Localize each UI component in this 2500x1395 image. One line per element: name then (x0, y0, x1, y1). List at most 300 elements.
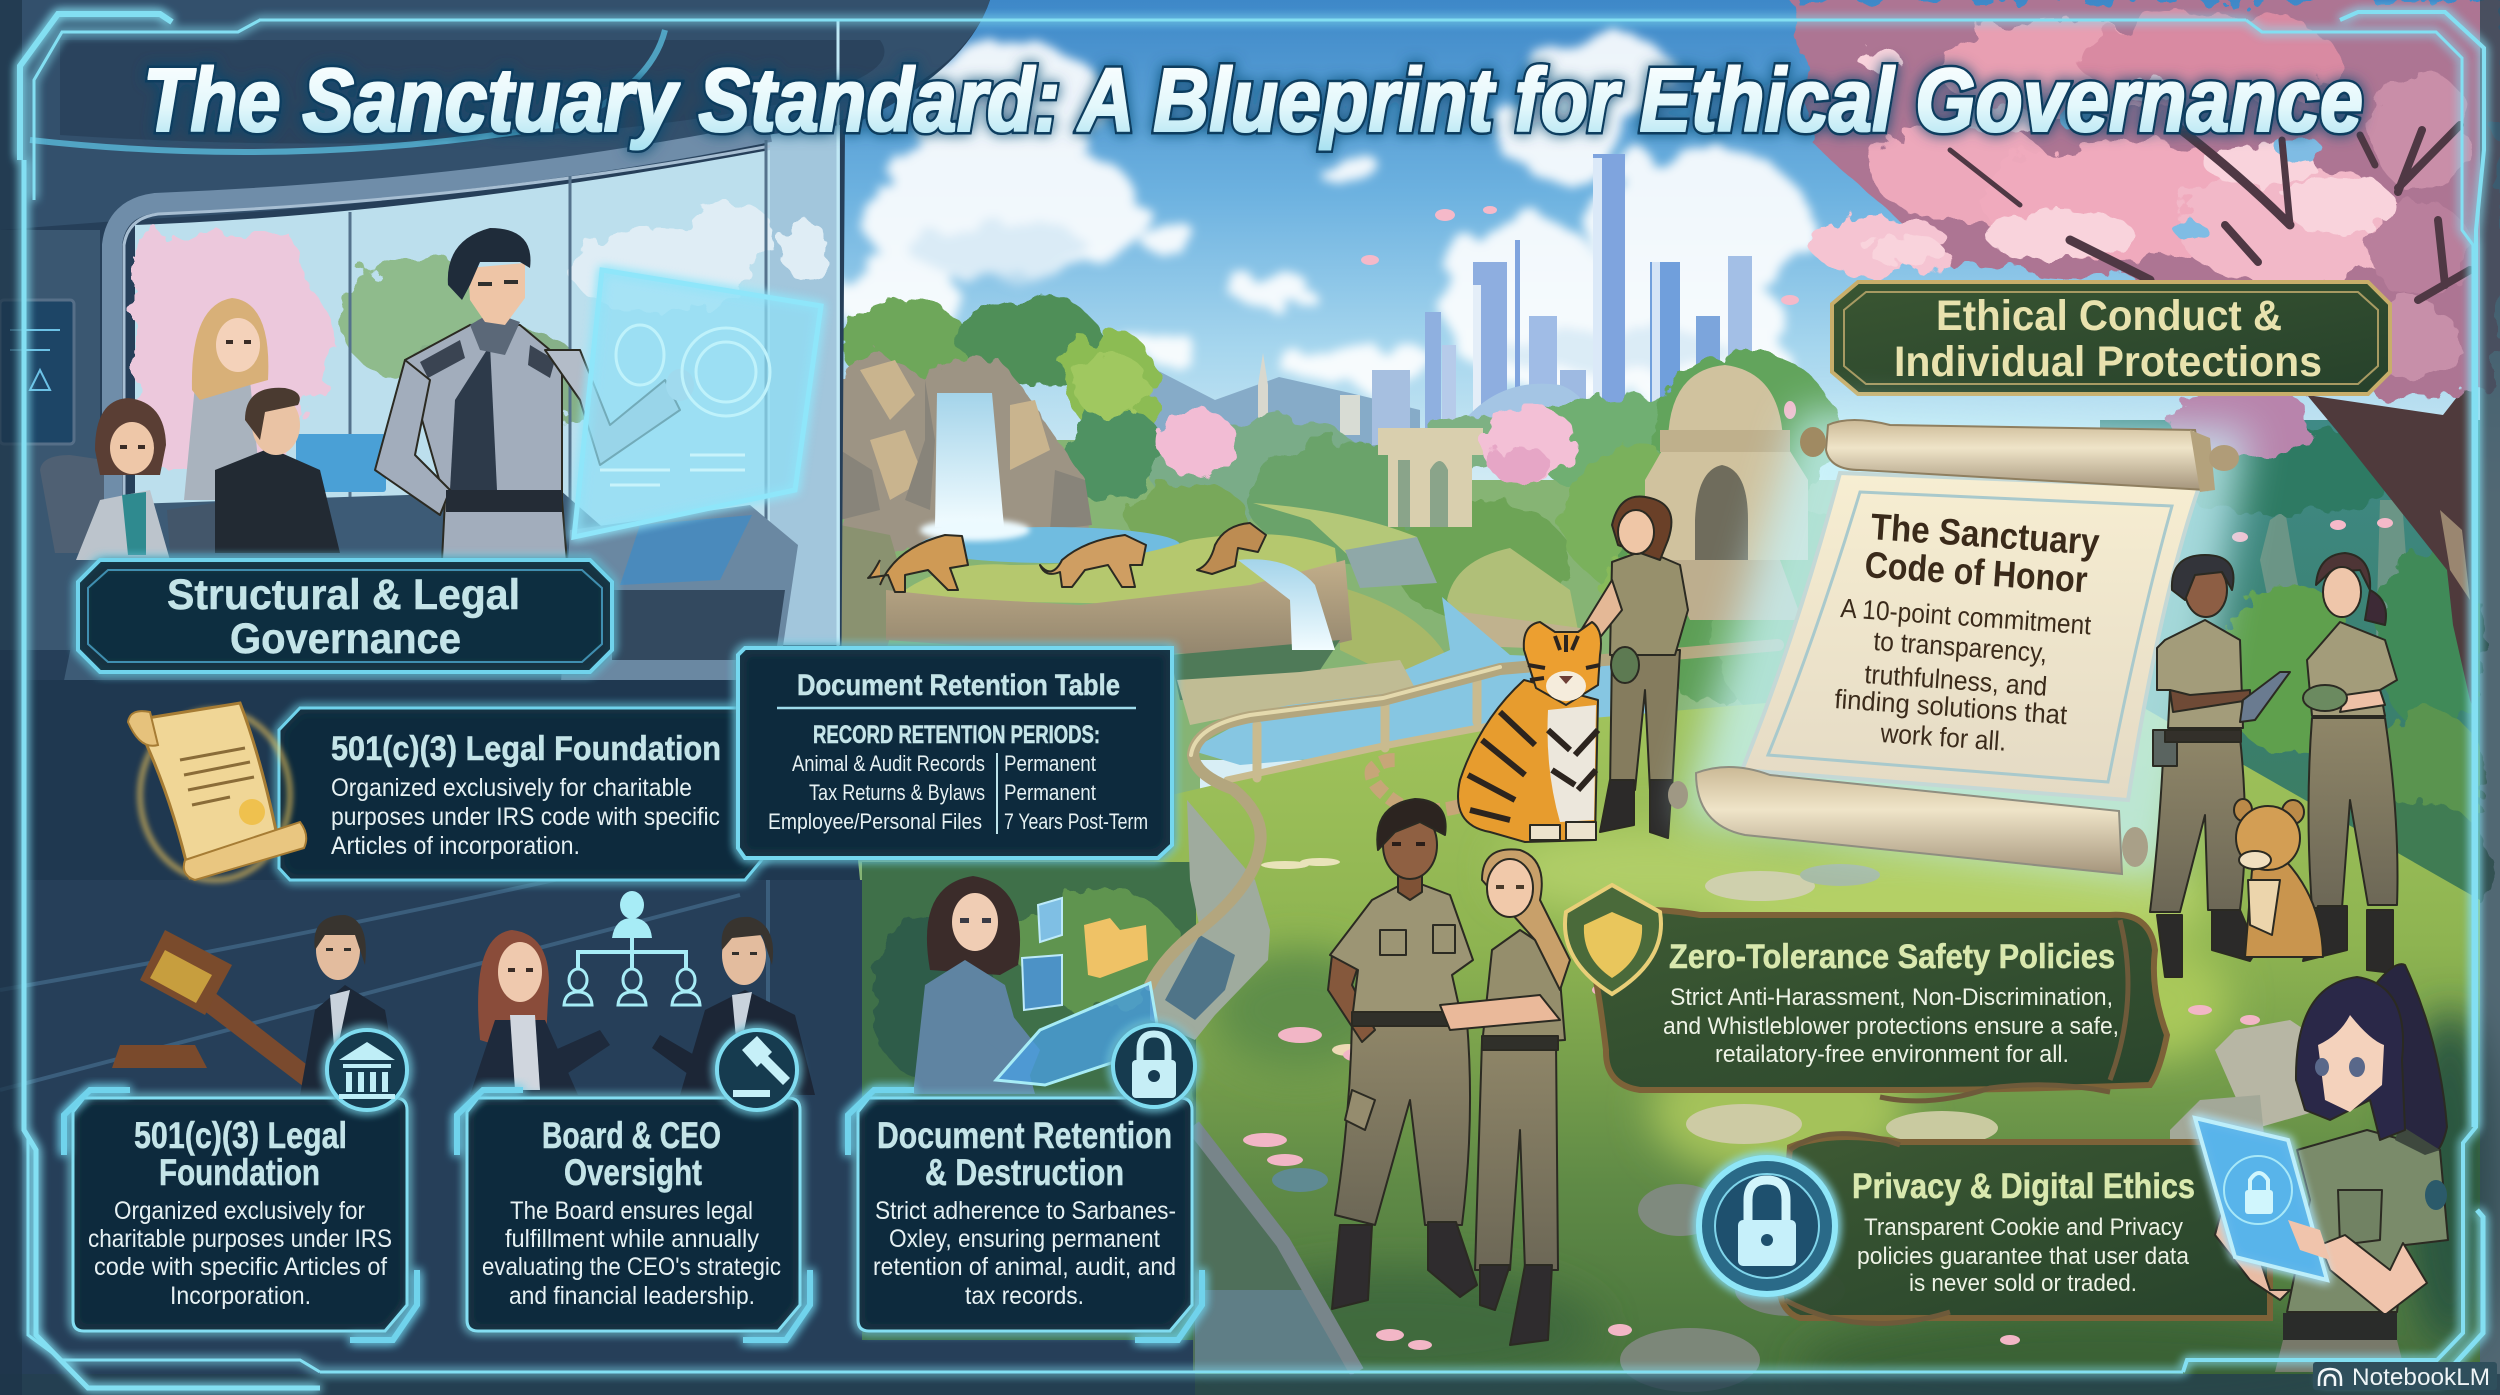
icon: padlock badge (1113, 1025, 1195, 1107)
woman ranger bottom right (2195, 964, 2448, 1372)
paper inner border (1768, 492, 2172, 782)
table rows: 7 Years Post-Term (1004, 809, 1148, 834)
writing lines (180, 748, 254, 805)
coat (405, 325, 570, 600)
shirt (732, 992, 752, 1060)
ranger behind tiger (1575, 497, 1688, 838)
icon: floating folders and documents (1022, 898, 1148, 1010)
body: policies guarantee that user data (1857, 1243, 2190, 1270)
boots (1600, 780, 1672, 838)
corner accent bottom right (743, 1270, 810, 1340)
arm (985, 1000, 1040, 1075)
lower left rock and bush (840, 525, 906, 650)
face (952, 893, 998, 951)
hand (666, 369, 694, 401)
body: Oxley, ensuring permanent (889, 1225, 1160, 1253)
face (2323, 567, 2361, 617)
waterfall (935, 393, 1004, 527)
lower curve terrace (1340, 587, 1447, 680)
grass meadow (1150, 700, 2480, 1395)
table rows (768, 751, 1148, 834)
eyes (1392, 842, 1425, 846)
belt (2165, 730, 2241, 742)
lower grey railing (1193, 1126, 1357, 1372)
top-right corner (2183, 12, 2484, 1372)
card: legal foundation (64, 1090, 417, 1340)
heading line 2: Governance (230, 615, 461, 663)
file 2 (1022, 955, 1062, 1010)
body (2245, 860, 2323, 957)
female ranger (1440, 849, 1570, 1345)
body: Transparent Cookie and Privacy (1864, 1214, 2183, 1241)
eyes (326, 948, 351, 951)
top person (612, 891, 652, 938)
background: mid foliage (840, 295, 1890, 730)
face (2185, 563, 2227, 617)
muzzle (1546, 671, 1586, 701)
hair (95, 398, 166, 475)
badge background (2313, 1362, 2497, 1390)
trousers (2275, 1340, 2405, 1372)
bottom line (320, 1370, 2183, 1374)
chair (40, 455, 104, 553)
body (482, 1197, 781, 1310)
cargo pocket (1345, 1090, 1375, 1130)
icon: gold shield (1565, 885, 1661, 994)
inner shirt (122, 492, 146, 555)
icon: charter parchment (128, 703, 306, 880)
male ranger (1328, 799, 1477, 1309)
colonnade (1378, 428, 1483, 527)
background: park land base (840, 440, 2110, 890)
grass top (905, 534, 1340, 605)
cherry blossoms light clusters (1858, 50, 2395, 370)
legs (1335, 1022, 1470, 1225)
glass (574, 270, 821, 537)
eyes (960, 918, 991, 923)
body (1663, 984, 2119, 1068)
suit (300, 985, 400, 1095)
lower terrace stones (1177, 660, 1416, 725)
arm (1575, 580, 1622, 650)
background: forest behind right rangers (2100, 420, 2490, 940)
illustration: suited man right (652, 917, 815, 1095)
card frame (73, 1098, 407, 1331)
scroll body: to transparency, (1873, 626, 2048, 668)
hair (192, 298, 268, 400)
shirt (2287, 1130, 2448, 1312)
bottom band outside frame (0, 1374, 2500, 1395)
arm and hand (555, 1030, 610, 1075)
panel: section header ethical conduct (1832, 282, 2390, 394)
glove with plate (2303, 685, 2347, 711)
wall monitor (0, 300, 74, 444)
lower hand arm (2215, 1205, 2290, 1300)
icon: org chart (564, 891, 700, 1005)
eyes (120, 445, 145, 449)
boots (1480, 1265, 1552, 1345)
background: futuristic city skyline (1258, 154, 1752, 445)
desk (60, 490, 640, 700)
forest base (2100, 420, 2480, 940)
medallion (1699, 1158, 1835, 1294)
face (498, 942, 542, 1002)
commander figure (375, 228, 694, 600)
inner ring (1715, 1174, 1819, 1278)
gavel (733, 1036, 790, 1097)
card frame (467, 1098, 800, 1331)
suit (680, 990, 815, 1095)
title (542, 1115, 721, 1193)
scroll: sanctuary code of honor (1668, 410, 2250, 880)
dark chest panel (450, 345, 497, 490)
eyes (226, 340, 251, 344)
background: clouds (840, 33, 1810, 405)
face (2318, 1015, 2384, 1112)
lower rail (1227, 724, 1500, 780)
illustration: suited woman (470, 930, 610, 1095)
card: board and ceo oversight (457, 1090, 810, 1340)
face (252, 395, 300, 455)
body (1458, 680, 1598, 842)
body: evaluating the CEO's strategic (482, 1253, 781, 1281)
ceiling light strip (30, 30, 665, 152)
sky gaps in canopy (2060, 108, 2322, 240)
corner accent top left (848, 1090, 914, 1155)
heading: 501(c)(3) Legal Foundation (331, 730, 721, 768)
scroll title (1863, 506, 2101, 601)
hair (2172, 555, 2233, 600)
panel: privacy and digital ethics (1779, 1134, 2270, 1324)
title rule (777, 707, 1136, 709)
terrace ledge (886, 534, 1352, 700)
lock body (1738, 1220, 1796, 1266)
frame (738, 648, 1172, 858)
shirt (1482, 930, 1565, 1045)
keyhole (1148, 1070, 1160, 1082)
main top line (259, 18, 2246, 22)
card: document retention and destruction (848, 1090, 1202, 1340)
icon: glowing padlock medallion (1699, 1158, 1835, 1294)
wall (1150, 800, 1270, 1040)
colonnade gaps (1398, 460, 1448, 527)
badge circle (1113, 1025, 1195, 1107)
corner accent bottom right (1135, 1270, 1202, 1340)
corner accent bottom right (350, 1270, 417, 1340)
hair (1482, 849, 1570, 990)
body: retailatory-free environment for all. (1715, 1041, 2069, 1068)
path paving (1195, 1290, 1357, 1372)
belt (446, 490, 562, 512)
belly (1548, 705, 1596, 822)
legs (2308, 718, 2398, 908)
bottom curl (184, 822, 306, 880)
seated man (167, 388, 340, 553)
collar (470, 312, 520, 355)
panel: section header structural and legal governance (78, 560, 612, 672)
left arm (375, 360, 450, 515)
ponytail (2375, 964, 2447, 1160)
ceiling dark ring (60, 40, 884, 144)
console lower (612, 590, 785, 660)
scroll body: A 10-point commitment (1840, 593, 2093, 641)
background: distant mountains (1090, 362, 1420, 460)
forearm (2340, 690, 2385, 712)
sheet (135, 703, 280, 878)
eyes (2315, 1058, 2329, 1076)
face (110, 422, 154, 474)
blonde woman (184, 298, 268, 500)
body (88, 1197, 392, 1310)
heading line 1: Ethical Conduct & (1936, 292, 2282, 340)
cherry tree trunk (2307, 370, 2478, 720)
top-left inner (34, 20, 260, 200)
badge circle (717, 1030, 797, 1110)
body: and financial leadership. (509, 1282, 755, 1310)
ceiling (0, 0, 990, 230)
title: Board & CEO (542, 1115, 721, 1156)
table rows: Permanent (1004, 780, 1096, 805)
body text (331, 774, 720, 860)
body (873, 1197, 1176, 1310)
wordmark: NotebookLM (2352, 1364, 2490, 1391)
header frame (78, 560, 612, 672)
panel: document retention table (738, 648, 1172, 858)
bottom roller left knob (1668, 781, 1688, 809)
icon: courthouse badge (327, 1030, 407, 1110)
shield inner (1584, 912, 1642, 978)
river (1190, 597, 1650, 765)
body (868, 535, 968, 592)
panel: zero-tolerance safety policies (1594, 910, 2167, 1101)
suit (470, 1020, 578, 1095)
body: fulfillment while annually (505, 1225, 759, 1253)
title: 501(c)(3) Legal (134, 1115, 347, 1156)
window opening (135, 150, 770, 560)
eyes (1496, 885, 1524, 889)
top roller right knob (2209, 445, 2239, 471)
pond (920, 527, 1180, 563)
lock body (1132, 1060, 1176, 1098)
left side (24, 160, 320, 1388)
shoulder boards (420, 340, 555, 378)
raised tail (1372, 760, 1460, 810)
dial (616, 325, 770, 416)
utility pouch (2153, 730, 2177, 766)
body: The Board ensures legal (510, 1197, 753, 1225)
body: is never sold or traded. (1909, 1270, 2137, 1297)
folder (1084, 918, 1148, 978)
chest (2248, 880, 2280, 935)
card frame (858, 1098, 1192, 1331)
scroll body: finding solutions that (1834, 684, 2069, 730)
waterfall foam (920, 519, 1030, 541)
boots (1332, 1222, 1477, 1309)
header frame (1832, 282, 2390, 394)
clipboard (2240, 672, 2290, 722)
console screen (620, 515, 752, 585)
sound block (112, 1045, 207, 1068)
file 1 (1038, 898, 1062, 942)
face (216, 318, 260, 372)
top rail (1150, 645, 1778, 985)
bushes (2160, 425, 2490, 940)
forearm (2320, 1235, 2427, 1315)
foliage behind document officer (862, 862, 1196, 1340)
scroll title: The Sanctuary (1869, 506, 2101, 563)
belt (2283, 1313, 2397, 1340)
heading line 1: Structural & Legal (167, 571, 520, 619)
grass light and shade patches (1200, 825, 2500, 1395)
golden railing (1150, 645, 1778, 985)
bottom roller right knob (2122, 827, 2148, 867)
shackle (1140, 1034, 1168, 1062)
rock formation (840, 352, 1092, 650)
illustration: suited man left (300, 915, 400, 1095)
illustration: document officer (913, 876, 1040, 1094)
shirt (1330, 880, 1473, 1020)
stepping stones and rocks (1272, 864, 2320, 1392)
body: tax records. (965, 1282, 1084, 1310)
uniform (913, 960, 1035, 1094)
icon: holographic laptop (996, 983, 1158, 1085)
body: Organized exclusively for (114, 1197, 365, 1225)
title (134, 1115, 347, 1193)
petals (1361, 206, 2393, 542)
walkway grass (1253, 503, 1417, 557)
trunk highlight (2440, 510, 2470, 600)
hair (2316, 553, 2370, 590)
tan boulders (860, 360, 1050, 500)
shackle (1748, 1180, 1786, 1222)
walkway wall (1345, 537, 1437, 588)
glass side pane (766, 125, 840, 645)
body: and Whistleblower protections ensure a safe, (1663, 1013, 2119, 1040)
desk monitor (296, 434, 386, 492)
body: Strict adherence to Sarbanes- (875, 1197, 1176, 1225)
sleeve badge (2425, 1180, 2447, 1210)
grey boulders (840, 380, 1092, 530)
gold band (150, 950, 212, 1003)
right arm (545, 350, 680, 465)
floor diagonal (0, 815, 840, 1100)
body: Strict Anti-Harassment, Non-Discrimination, (1670, 984, 2113, 1011)
hair (722, 917, 773, 965)
lower floor (0, 680, 860, 880)
boots (2157, 910, 2257, 977)
meadow flowers (1243, 858, 2260, 1350)
table rows: Employee/Personal Files (768, 809, 982, 834)
head (140, 930, 232, 1015)
vine frame (1779, 1137, 2270, 1318)
bottom inner (28, 1135, 320, 1372)
title: Foundation (159, 1152, 320, 1193)
right ranger male (2150, 555, 2290, 977)
face (468, 263, 525, 325)
face (722, 925, 766, 985)
table subheading: RECORD RETENTION PERIODS: (813, 721, 1100, 749)
right ring wall (1447, 610, 1580, 650)
title: Privacy & Digital Ethics (1852, 1167, 2195, 1206)
bottom right (2320, 1210, 2483, 1380)
scroll glow (1680, 410, 2250, 880)
face (1487, 859, 1533, 917)
muzzle (2239, 851, 2271, 869)
legs (1610, 650, 1680, 790)
head (1524, 622, 1601, 705)
title: Oversight (564, 1152, 702, 1193)
legs (1475, 1040, 1558, 1270)
curved upper walkway (1253, 503, 1580, 680)
scroll body: work for all. (1879, 718, 2007, 757)
console (560, 505, 798, 700)
tree trunks (2260, 500, 2412, 640)
temple band (1660, 430, 1790, 452)
cherry trees in the park (1157, 405, 1577, 483)
illustration: gavel (112, 930, 320, 1090)
stone ledge (886, 560, 1352, 655)
eyes (478, 280, 518, 286)
body text: Articles of incorporation. (331, 832, 580, 860)
title: Document Retention (877, 1115, 1172, 1156)
boots (2303, 906, 2393, 973)
rock mass (840, 352, 1090, 560)
outside-frame right margin (2480, 0, 2500, 1395)
shirt pockets (1380, 925, 1455, 955)
top roller left knob (1800, 427, 1826, 457)
body: charitable purposes under IRS (88, 1225, 392, 1253)
suit (215, 448, 340, 553)
animal: tiger on ledge (868, 535, 968, 592)
folded arm (1440, 995, 1560, 1030)
ranger pair (1328, 799, 1570, 1345)
shaded inner (1165, 935, 1235, 1020)
staff persons (564, 969, 700, 1005)
upper fingers (2288, 1220, 2330, 1260)
table title: Document Retention Table (797, 669, 1120, 702)
head (2236, 806, 2300, 870)
heading line 2: Individual Protections (1894, 338, 2322, 386)
left arm (1328, 955, 1375, 1042)
window frame inner highlight (124, 146, 770, 560)
face (316, 920, 360, 980)
frame (279, 708, 770, 880)
hair (448, 228, 530, 300)
cherry blossom canopy (1790, 0, 2500, 458)
foliage base (862, 862, 1196, 1340)
top-right inner (2246, 20, 2473, 1127)
seal (239, 799, 265, 825)
arm and hand (652, 1035, 720, 1090)
connectors (578, 938, 686, 970)
legs (2150, 738, 2245, 912)
posts (1257, 678, 1477, 778)
keyhole (1761, 1234, 1773, 1246)
shirt pocket (2338, 1190, 2382, 1245)
vine accent (1880, 920, 2128, 1101)
panel: 501(c)(3) legal foundation (279, 708, 770, 880)
eyes (732, 952, 757, 955)
vine accent (1785, 1134, 1950, 1324)
right ranger female (2303, 553, 2398, 973)
corner accent top left (64, 1090, 130, 1155)
hologram display (574, 270, 821, 537)
title: Zero-Tolerance Safety Policies (1669, 938, 2115, 976)
body (1857, 1214, 2190, 1297)
glass edge (836, 20, 840, 700)
shield outer (1565, 885, 1661, 994)
top roller (1826, 420, 2207, 490)
